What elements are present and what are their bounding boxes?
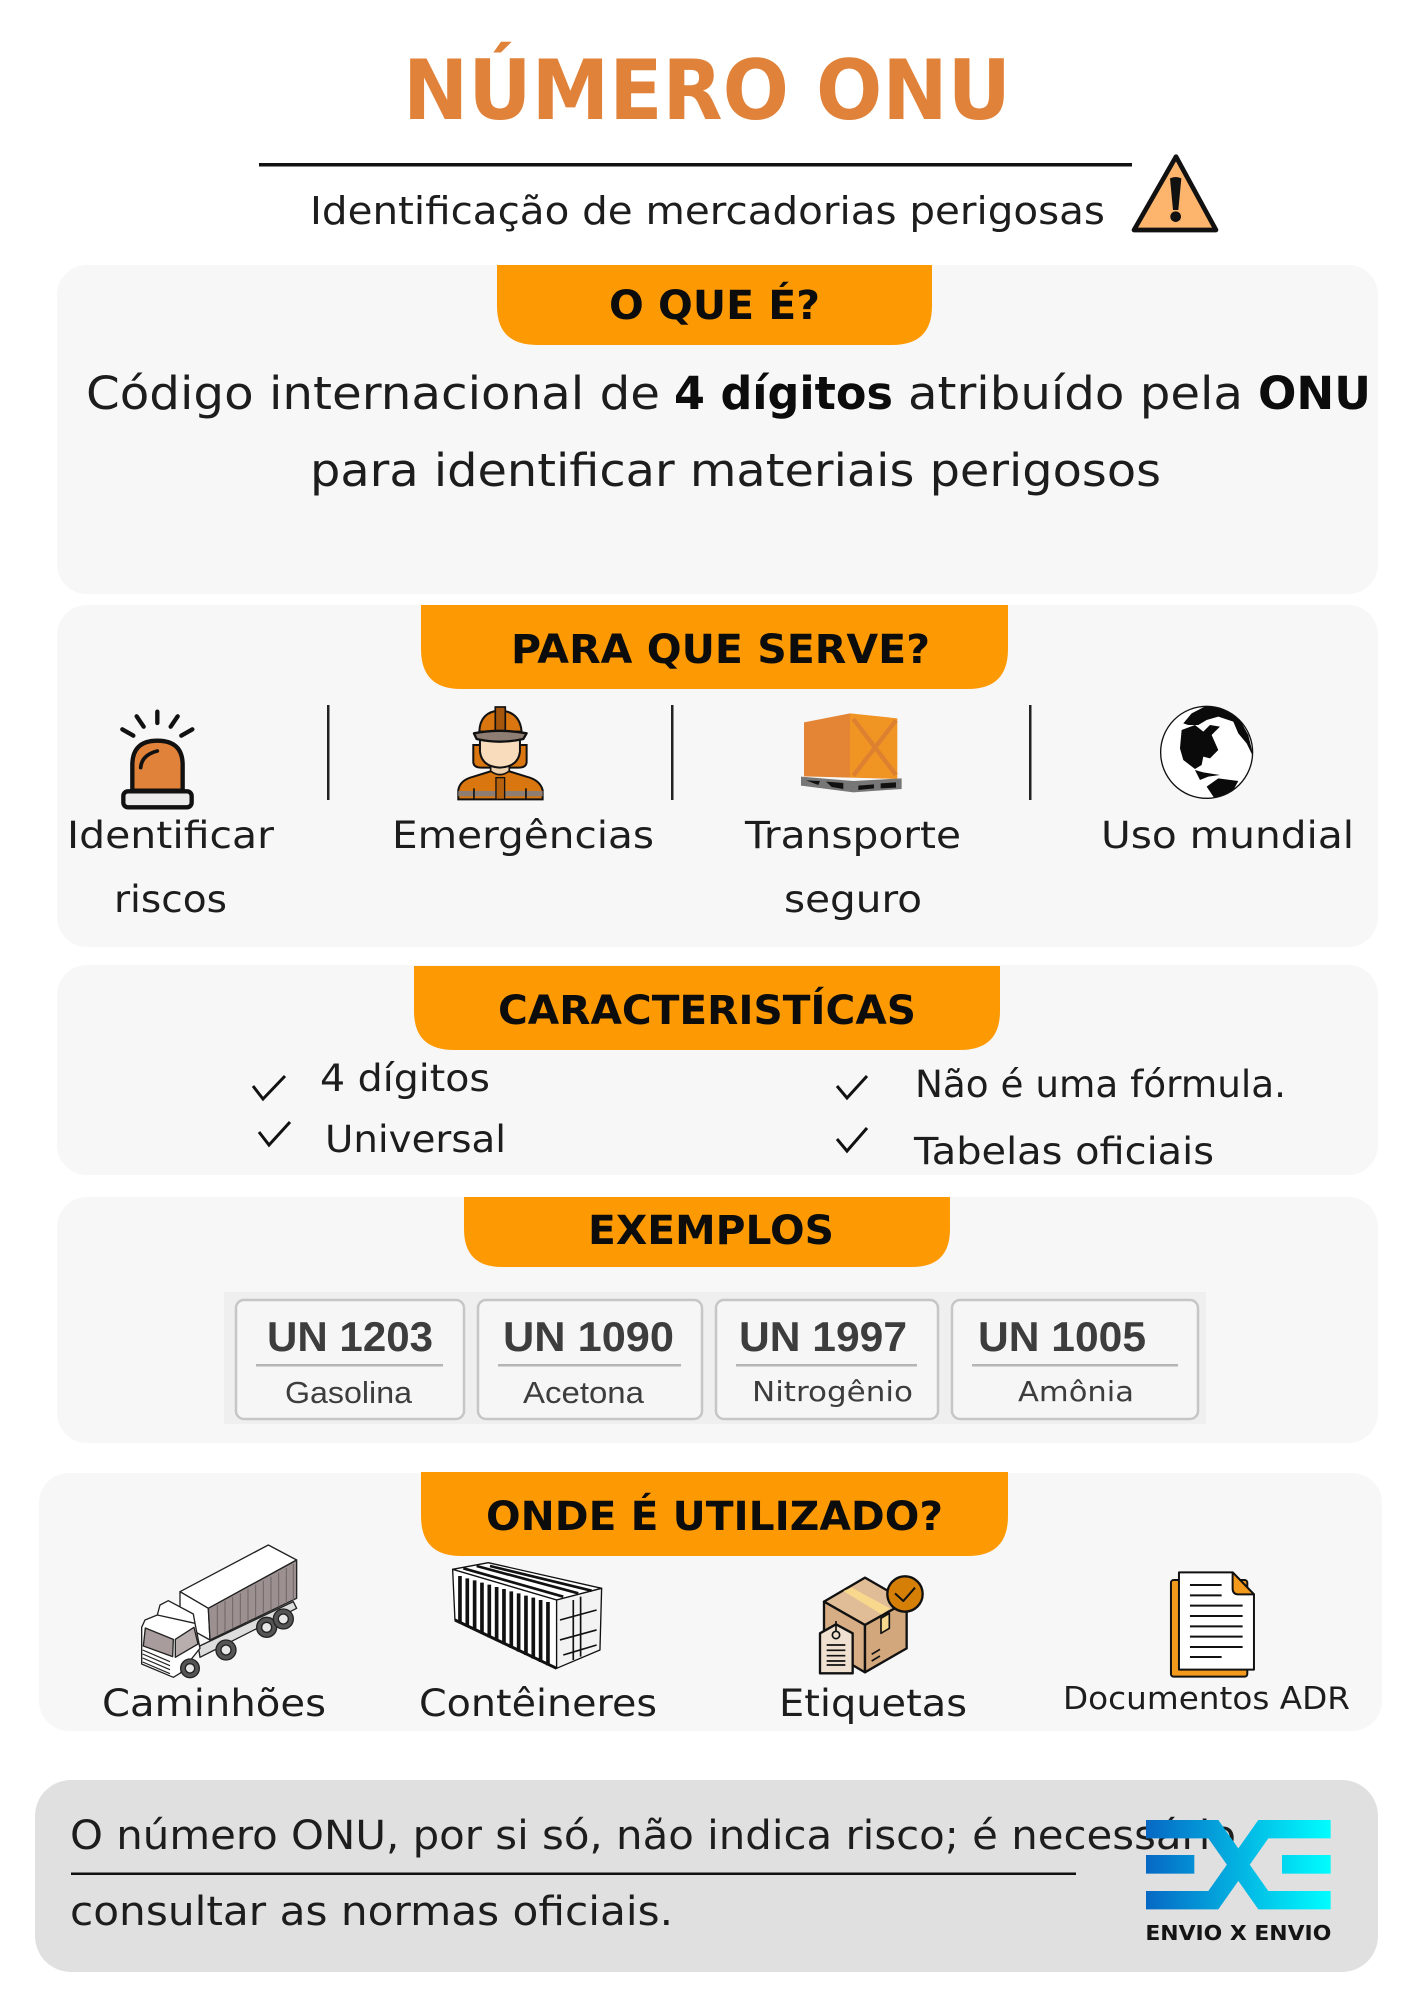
text block: note: consultar as normas oficiais.: [70, 1889, 673, 1935]
card: UN 1090: UN 1090: [503, 1313, 674, 1360]
label: emergências: Emergências: [392, 814, 654, 857]
icon: documents: [1171, 1572, 1254, 1677]
heading: características: [414, 966, 1000, 1050]
label: caminhões: Caminhões: [102, 1682, 326, 1725]
title: NÚMERO ONU: [403, 41, 1011, 139]
panel: footer note: [35, 1780, 1378, 1972]
label: transporte seguro: Transporte: [744, 814, 961, 857]
panel: onde é utilizado: [39, 1472, 1382, 1731]
logo: envio x envio: [1145, 1820, 1331, 1945]
text block: definition: para identificar materiais perigosos: [310, 444, 1161, 497]
icon: check 2: [259, 1122, 290, 1145]
text: tabelas oficiais: Tabelas oficiais: [913, 1130, 1214, 1173]
icon: shipping container: [453, 1563, 602, 1668]
icon: check 4: [837, 1128, 867, 1151]
card: UN 1090: [478, 1300, 702, 1419]
panel: o que é: [57, 265, 1378, 594]
logo: envio x envio: ENVIO X ENVIO: [1145, 1921, 1331, 1945]
panel: para que serve: [71, 605, 1350, 920]
text: não é uma fórmula: Não é uma fórmula.: [915, 1063, 1286, 1106]
card: UN 1997: Nitrogênio: [752, 1375, 913, 1408]
label: transporte seguro: seguro: [784, 878, 922, 921]
label: identificar riscos: riscos: [114, 878, 227, 921]
text: universal: Universal: [325, 1118, 506, 1161]
heading: para que serve: PARA QUE SERVE?: [511, 627, 930, 673]
heading: para que serve: [421, 605, 1008, 689]
card: UN 1090: Acetona: [523, 1375, 645, 1410]
icon: globe: [1161, 706, 1254, 799]
label: uso mundial: Uso mundial: [1101, 814, 1354, 857]
card: UN 1997: UN 1997: [739, 1313, 907, 1360]
icon: parcel with tag: [820, 1576, 923, 1673]
text block: note: O número ONU, por si só, não indica risco; é necessário: [70, 1813, 1236, 1859]
text: 4 dígitos: 4 dígitos: [320, 1057, 490, 1100]
heading: exemplos: EXEMPLOS: [588, 1208, 834, 1254]
label: identificar riscos: [67, 814, 275, 921]
card: UN 1997: [716, 1300, 938, 1419]
card: UN 1203: Gasolina: [285, 1375, 413, 1410]
text block: note: [70, 1813, 1236, 1935]
heading: características: CARACTERISTÍCAS: [498, 986, 916, 1034]
label: documentos adr: Documentos ADR: [1063, 1681, 1350, 1717]
card: UN 1203: [236, 1300, 464, 1419]
subtitle: Identificação de mercadorias perigosas: [310, 189, 1105, 233]
heading: exemplos: [464, 1197, 950, 1267]
icon: check 3: [837, 1076, 867, 1098]
text block: definition: 4 dígitos: [674, 367, 893, 420]
label: identificar riscos: Identificar: [67, 814, 275, 857]
example cards: [224, 1292, 1206, 1424]
subtitle rule: [259, 163, 1132, 166]
label: etiquetas: Etiquetas: [779, 1682, 967, 1725]
text block: definition: [86, 367, 1371, 497]
icon: alarm light: [122, 712, 192, 807]
panel: características: [57, 965, 1378, 1175]
card: UN 1005: UN 1005: [978, 1313, 1146, 1360]
heading: onde é utilizado: ONDE É UTILIZADO?: [486, 1492, 943, 1540]
icon: check 1: [253, 1076, 285, 1099]
label: transporte seguro: [744, 814, 961, 921]
card: UN 1005: Amônia: [1018, 1375, 1134, 1408]
text block: definition: ONU: [1258, 367, 1371, 420]
card: UN 1203: UN 1203: [267, 1313, 433, 1360]
heading: o que é: [497, 265, 932, 345]
heading: onde é utilizado: [421, 1472, 1008, 1556]
icon: cargo box on pallet: [801, 713, 902, 792]
heading: o que é: O QUE É?: [609, 281, 820, 329]
card: UN 1005: [952, 1300, 1198, 1419]
icon: warning triangle: [1134, 157, 1216, 230]
text block: definition: atribuído pela: [908, 367, 1243, 420]
panel: exemplos: [57, 1197, 1378, 1443]
icon: truck: [142, 1545, 297, 1678]
text block: definition: Código internacional de: [86, 367, 660, 420]
icon: emergency worker: [458, 707, 543, 799]
label: contêineres: Contêineres: [419, 1682, 657, 1725]
